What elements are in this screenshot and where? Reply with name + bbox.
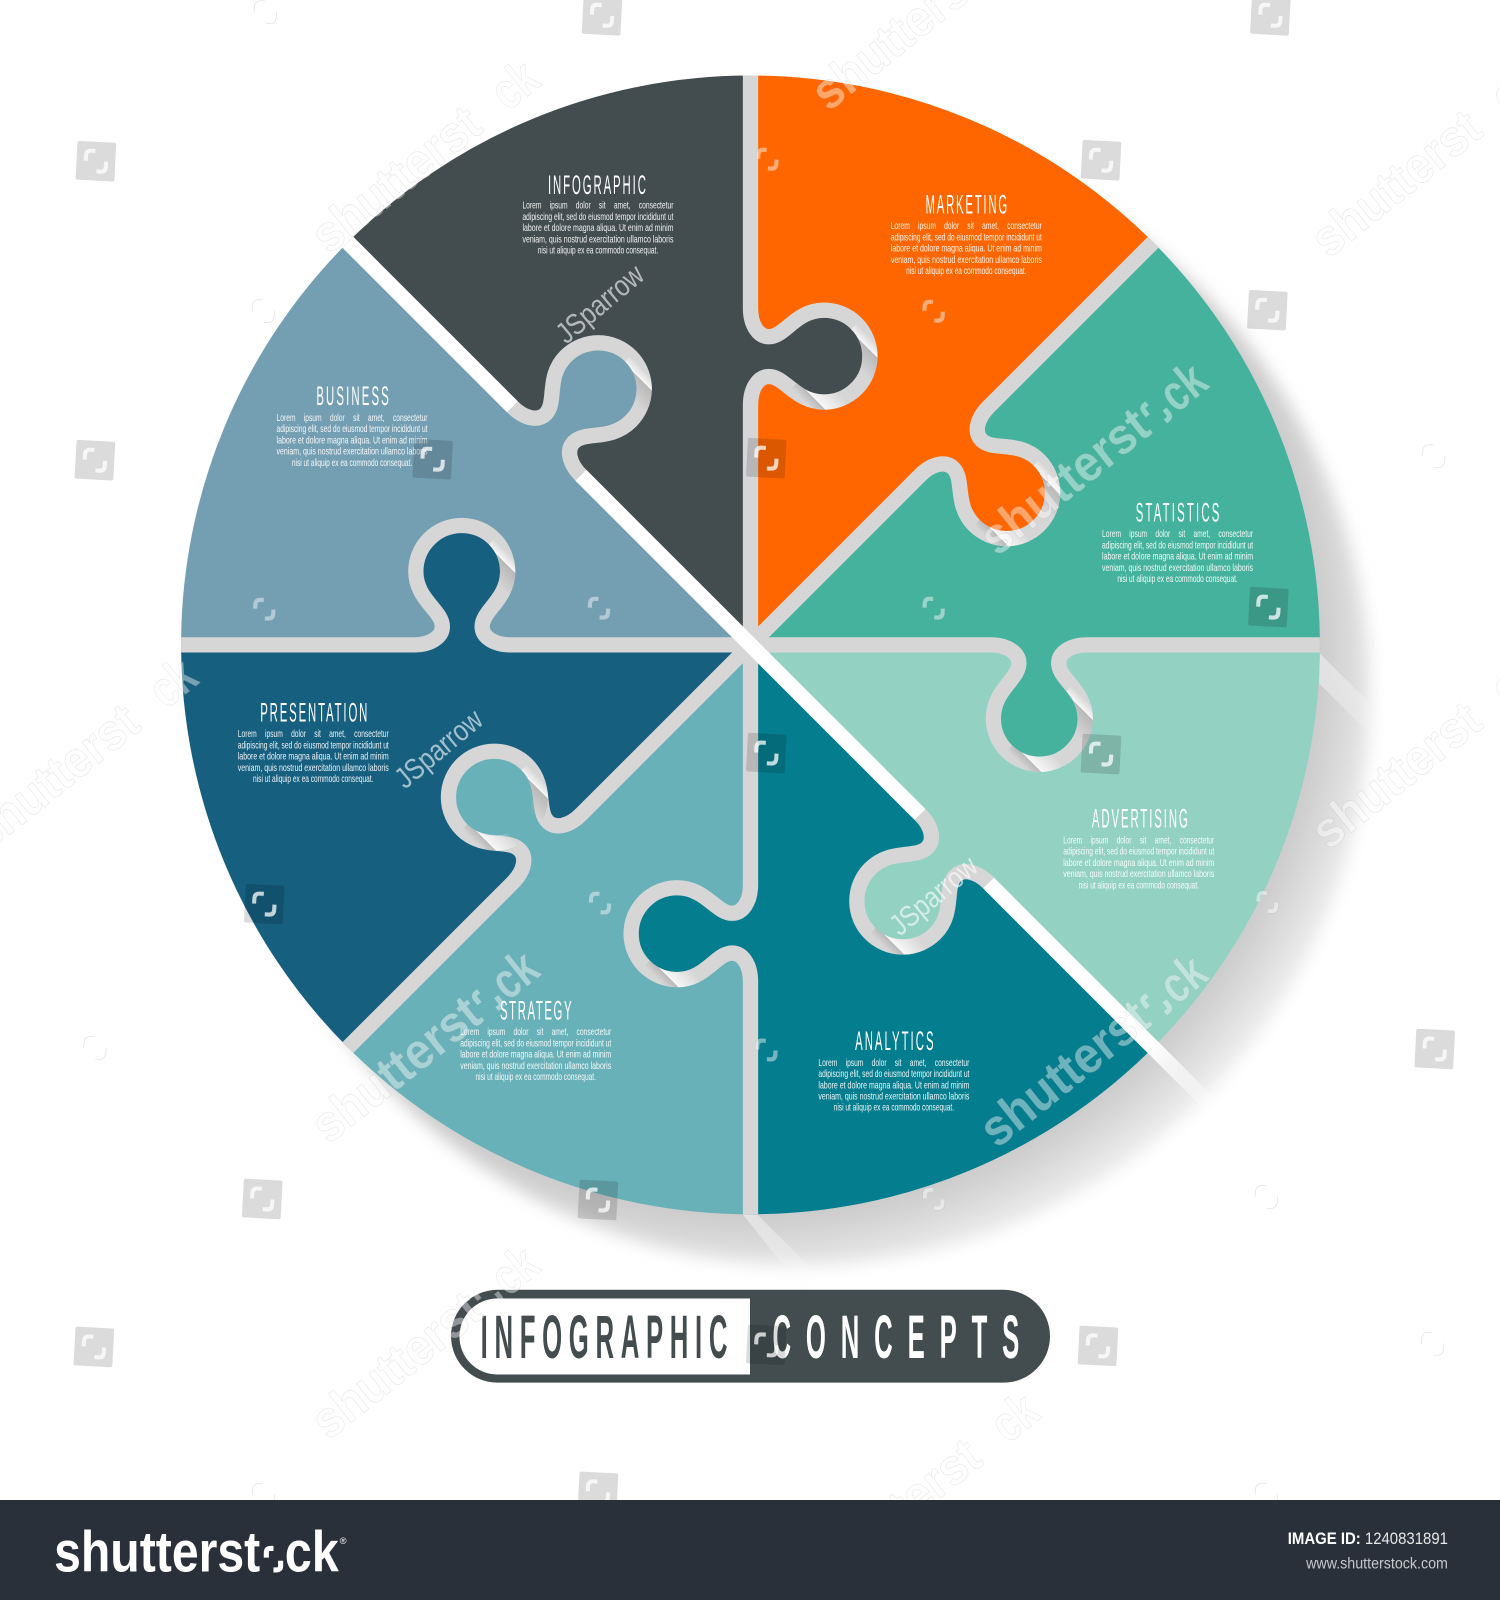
panel: business: nisi ut aliquip ex ea commodo consequat.	[292, 458, 412, 469]
watermark: diagonal shutterstock marks: ck	[1148, 942, 1218, 1014]
footer url: www.shutterstock.com	[1305, 1555, 1448, 1572]
panel: marketing	[466, 0, 1238, 729]
watermark: diagonal shutterstock marks: shutterst	[300, 1280, 492, 1449]
panel: marketing: adipiscing elit, sed do eiusmod tempor incididunt ut	[891, 232, 1042, 243]
panel: analytics: labore et dolore magna aliqua. Ut enim ad minim	[818, 1080, 969, 1091]
panel: business	[63, 158, 835, 930]
panel: marketing: labore et dolore magna aliqua. Ut enim ad minim	[891, 244, 1042, 255]
title pill: infographic concepts: CONCEPTS	[772, 1302, 1019, 1371]
panel: infographic	[348, 76, 870, 645]
panel: marketing: Lorem ipsum dolor sit amet, consectetur	[891, 221, 1042, 232]
panel: infographic: nisi ut aliquip ex ea commodo consequat.	[538, 246, 658, 257]
panel: marketing: veniam, quis nostrud exercitation ullamco laboris	[891, 255, 1042, 266]
panel: presentation: labore et dolore magna aliqua. Ut enim ad minim	[238, 752, 389, 763]
watermark: diagonal shutterstock marks: ck	[1148, 350, 1218, 423]
panel: advertising: adipiscing elit, sed do eiusmod tempor incididunt ut	[1063, 847, 1214, 858]
watermark: diagonal shutterstock marks: ck	[979, 1381, 1050, 1453]
panel: advertising: nisi ut aliquip ex ea commodo consequat.	[1079, 880, 1199, 891]
panel: presentation: adipiscing elit, sed do eiusmod tempor incididunt ut	[238, 740, 389, 751]
title pill: infographic concepts: INFOGRAPHIC	[481, 1302, 727, 1371]
watermark: diagonal shutterstock marks: ck	[137, 646, 208, 718]
watermark: diagonal shutterstock marks: shutterst	[300, 984, 492, 1153]
panel: analytics: veniam, quis nostrud exercitation ullamco laboris	[818, 1091, 969, 1102]
panel: infographic: adipiscing elit, sed do eiusmod tempor incididunt ut	[522, 212, 674, 223]
watermark: diagonal shutterstock marks: JSparrow	[388, 703, 490, 795]
panel: strategy: adipiscing elit, sed do eiusmod tempor incididunt ut	[460, 1038, 611, 1049]
panel: statistics: nisi ut aliquip ex ea commodo consequat.	[1117, 574, 1238, 585]
panel: statistics: STATISTICS	[1136, 498, 1219, 528]
panel: analytics: ANALYTICS	[855, 1027, 934, 1057]
panel: strategy	[263, 560, 1035, 1332]
watermark: diagonal shutterstock marks: shutterst	[800, 1427, 992, 1596]
panel: strategy: veniam, quis nostrud exercitation ullamco laboris	[460, 1061, 611, 1072]
watermark: diagonal shutterstock marks: ck	[479, 48, 550, 120]
panel: statistics: labore et dolore magna aliqua. Ut enim ad minim	[1102, 552, 1253, 563]
panel: strategy: nisi ut aliquip ex ea commodo consequat.	[476, 1072, 596, 1083]
panel: advertising: ADVERTISING	[1092, 804, 1188, 834]
panel: presentation	[181, 526, 751, 1048]
watermark: diagonal shutterstock marks: ck	[479, 938, 550, 1010]
watermark: diagonal shutterstock marks: shutterst	[968, 988, 1160, 1158]
watermark: diagonal shutterstock marks: shutterst	[1300, 690, 1492, 860]
panel: business: labore et dolore magna aliqua. Ut enim ad minim	[277, 435, 428, 446]
panel: statistics: Lorem ipsum dolor sit amet, consectetur	[1102, 529, 1254, 540]
footer logo: ®	[340, 1536, 347, 1546]
panel: strategy: labore et dolore magna aliqua. Ut enim ad minim	[460, 1050, 611, 1061]
panel: statistics: adipiscing elit, sed do eiusmod tempor incididunt ut	[1102, 540, 1253, 551]
panel: infographic: labore et dolore magna aliqua. Ut enim ad minim	[522, 223, 673, 234]
panel: presentation: veniam, quis nostrud exercitation ullamco laboris	[238, 763, 389, 774]
panel: business: Lorem ipsum dolor sit amet, consectetur	[277, 413, 428, 424]
watermark: diagonal shutterstock marks: JSparrow	[550, 258, 651, 350]
footer logo: ck	[285, 1520, 339, 1584]
watermark: diagonal shutterstock marks: JSparrow	[883, 850, 985, 942]
footer bar	[0, 1500, 1500, 1600]
panel: analytics	[631, 645, 1153, 1214]
panel: infographic: veniam, quis nostrud exercitation ullamco laboris	[522, 234, 674, 245]
panel: presentation: PRESENTATION	[260, 698, 367, 728]
panel: advertising: labore et dolore magna aliqua. Ut enim ad minim	[1063, 858, 1214, 869]
panel: presentation: nisi ut aliquip ex ea commodo consequat.	[253, 774, 373, 785]
panel: strategy: Lorem ipsum dolor sit amet, consectetur	[460, 1027, 612, 1038]
panel: advertising: Lorem ipsum dolor sit amet, consectetur	[1063, 835, 1215, 846]
panel: advertising	[666, 360, 1438, 1132]
footer image id: IMAGE ID: 1240831891	[1288, 1530, 1448, 1548]
panel: business: BUSINESS	[316, 382, 389, 412]
panel: presentation: Lorem ipsum dolor sit amet, consectetur	[238, 729, 389, 740]
panel: infographic: INFOGRAPHIC	[548, 170, 646, 200]
panel: infographic: Lorem ipsum dolor sit amet, consectetur	[522, 201, 674, 212]
panel: business: veniam, quis nostrud exercitation ullamco laboris	[277, 447, 428, 458]
title pill: infographic concepts	[451, 1290, 1050, 1383]
panel: statistics: veniam, quis nostrud exercitation ullamco laboris	[1102, 563, 1253, 574]
panel: strategy: STRATEGY	[500, 996, 572, 1026]
puzzle gaps between pieces	[181, 76, 1320, 1214]
watermark: diagonal shutterstock marks: shutterst	[968, 396, 1160, 566]
panel: statistics	[751, 242, 1320, 764]
panel: marketing: nisi ut aliquip ex ea commodo consequat.	[906, 266, 1027, 277]
watermark: diagonal shutterstock marks: ck	[479, 1234, 550, 1306]
panel: marketing: MARKETING	[926, 190, 1007, 220]
disc long shadow	[232, 127, 1388, 1294]
panel: business: adipiscing elit, sed do eiusmod tempor incididunt ut	[277, 424, 428, 435]
panel: analytics: adipiscing elit, sed do eiusmod tempor incididunt ut	[818, 1069, 970, 1080]
panel: analytics: Lorem ipsum dolor sit amet, consectetur	[818, 1058, 970, 1069]
panel: analytics: nisi ut aliquip ex ea commodo consequat.	[834, 1103, 954, 1114]
watermark: diagonal shutterstock marks: shutterst	[1300, 98, 1492, 268]
watermark: diagonal shutterstock marks: shutterst	[300, 94, 492, 264]
footer logo: shutterst	[54, 1520, 260, 1584]
panel: advertising: veniam, quis nostrud exercitation ullamco laboris	[1063, 869, 1214, 880]
